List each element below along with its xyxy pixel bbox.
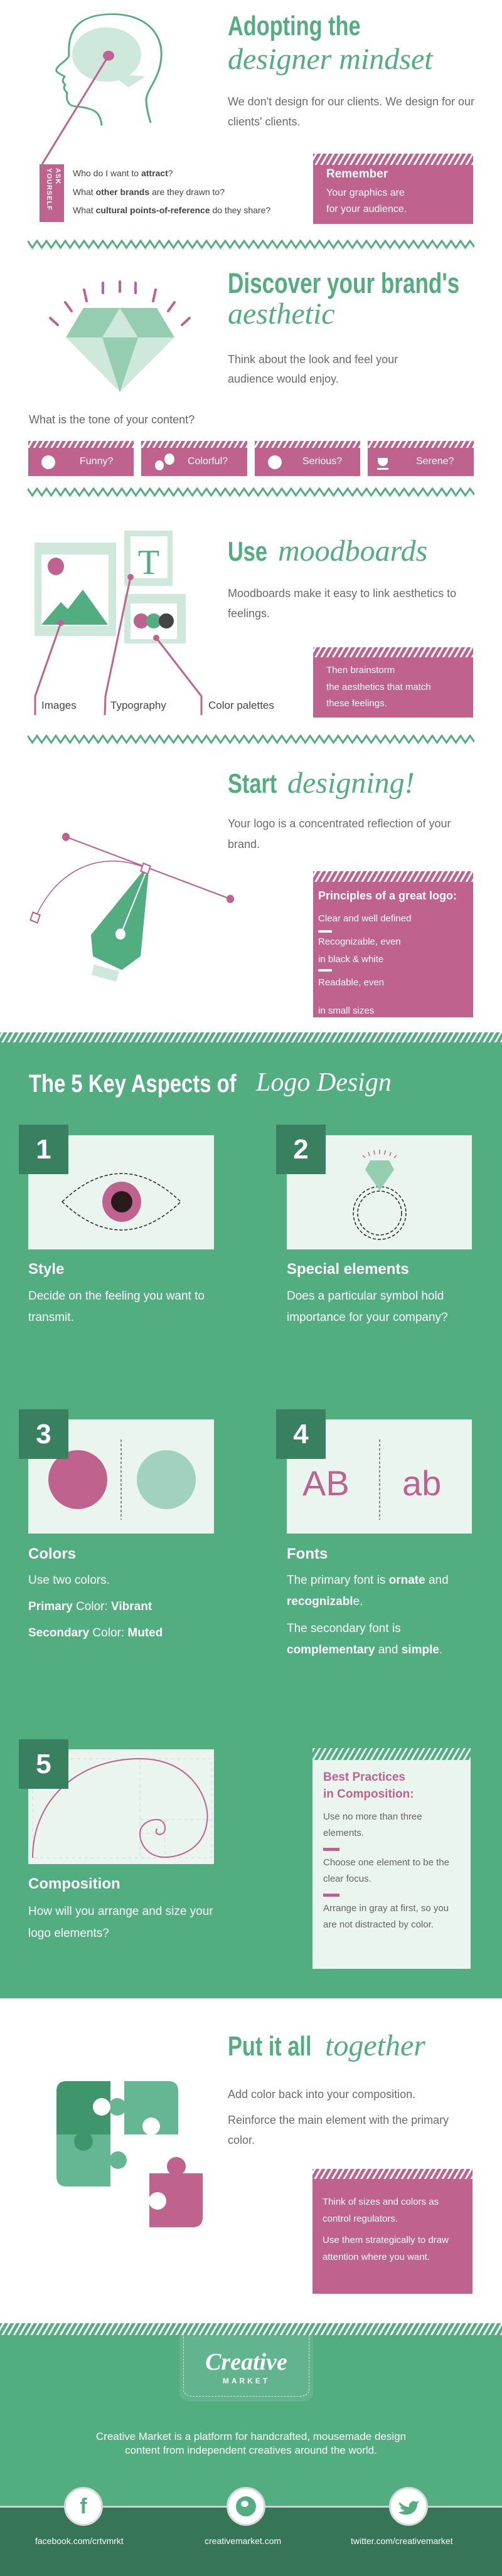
callout: principles of a great logo: Principles of a great logo: [318,889,457,902]
title: adopting the designer mindset [228,11,433,76]
callout: sizes and colors: Use them strategically to draw attention where you want. [323,2235,449,2262]
title: adopting the designer mindset: Adopting the [228,11,361,41]
text: about: Creative Market is a platform for handcrafted, mousemade design [96,2430,406,2442]
button: funny: Funny? [80,456,113,467]
card 3: colors: 3 [36,1419,51,1450]
text: intro 2: Think about the look and feel your audience would enjoy. [228,353,398,385]
callout: principles of a great logo: Recognizable, even [318,936,401,947]
callout: sizes and colors: Think of sizes and colors as control regulators. [323,2197,439,2224]
button: serene [368,441,474,476]
callout: principles of a great logo: Clear and well defined [318,913,411,924]
labels: moodboard [41,699,274,711]
card 1: style: Decide on the feeling you want to transmit. [28,1290,205,1324]
icon: eye [61,1173,181,1231]
title: adopting the designer mindset: designer mindset [228,43,433,76]
callout: principles of a great logo: in small sizes [318,1005,374,1016]
card 3: colors: Use two colors. [28,1574,110,1587]
text: questions: What other brands are they drawn to? [73,187,225,197]
logo: creative market: Creative [205,2349,287,2375]
card 2: special elements: Special elements [287,1261,409,1278]
title: start designing: Start [228,768,277,799]
label: ask yourself [40,164,64,222]
tone buttons [28,441,474,476]
title: discover your brand's aesthetic [228,267,459,331]
logo: creative market: MARKET [223,2377,270,2385]
callout: remember: Your graphics are [326,188,405,198]
callout: brainstorm: Then brainstorm [326,665,395,676]
icon: color circles [48,1439,196,1520]
callout: principles of a great logo [313,871,473,1017]
card 1: style: 1 [36,1134,51,1165]
icon: diamond [49,280,191,392]
links: twitter.com/creativemarket [351,2536,453,2546]
callout: remember: Remember [326,167,388,181]
logo: creative market [179,2335,313,2402]
card 3: colors: Colors [28,1545,76,1562]
title: use moodboards: Use [228,536,267,567]
heading: 5 key aspects [29,1068,392,1098]
button: serious [255,441,360,476]
card 4: fonts: The secondary font is complementary and simple. [287,1622,442,1656]
links: facebook.com/crtvmrkt [35,2536,124,2546]
card 2: special elements: 2 [293,1134,309,1165]
text: put it together [228,2088,449,2146]
zigzag [28,734,474,744]
labels: moodboard: Typography [110,699,166,711]
card 1: style [19,1125,214,1324]
callout: principles of a great logo: in black & white [318,954,383,965]
illustration: moodboard: T [138,543,159,582]
card 1: style: Style [28,1261,64,1278]
label: ask yourself: YOURSELF [45,168,53,211]
button: colorful [141,441,247,476]
callout: best practices in composition: in Composition: [323,1788,414,1801]
callout: best practices in composition: Use no more than three elements. Choose one element to be the clear focus. Arrange in gray at first, so you are not distracted by color. [323,1811,449,1930]
panel: 5 key aspects [0,1032,502,1998]
text: put it together: Add color back into your composition. [228,2088,415,2101]
title: start designing [228,766,415,800]
icon: head with brain [41,13,163,164]
title: put it all together [228,2029,425,2062]
label: ask yourself: ASK [54,168,61,184]
text: questions: Who do I want to attract? [73,168,173,178]
callout: brainstorm [313,647,473,718]
text: intro 1: We don't design for our clients. We design for our clients' clients. [228,95,474,128]
icon: golden spiral [32,1758,212,1858]
text: about: content from independent creatives around the world. [125,2444,377,2456]
card 5: composition: Composition [28,1875,120,1892]
callout: sizes and colors [312,2169,473,2294]
card 4: fonts: 4 [293,1419,309,1450]
text: questions [73,168,270,215]
callout: brainstorm: the aesthetics that match [326,682,431,692]
callout: best practices in composition: Best Practices [323,1771,405,1784]
icon: facebook [64,2487,103,2526]
callout: remember [313,154,473,224]
title: discover your brand's aesthetic: Discover your brand's [228,267,459,299]
icon: globe [227,2487,265,2526]
callout: remember: for your audience. [326,204,407,215]
text: about [96,2430,406,2456]
icon: twitter [389,2487,428,2526]
card 5: composition [19,1739,214,1940]
card 4: fonts [276,1409,472,1656]
icon: AB ab: AB [302,1463,350,1503]
card 5: composition: 5 [36,1749,51,1779]
text: tone question: What is the tone of your content? [29,413,195,426]
zigzag [28,487,474,497]
title: put it all together: together [325,2029,425,2062]
card 2: special elements [276,1125,472,1324]
button: serious: Serious? [302,456,342,467]
heading: 5 key aspects: Logo Design [256,1068,392,1097]
zigzag [28,240,474,250]
icon: pen tool [29,833,234,982]
title: discover your brand's aesthetic: aesthetic [228,297,335,331]
icon: puzzle [56,2081,203,2227]
footer [0,2323,502,2576]
button: funny [28,441,134,476]
callout: best practices in composition [312,1748,471,1969]
card 3: colors: Secondary Color: Muted [28,1626,163,1640]
card 5: composition: How will you arrange and size your logo elements? [28,1905,213,1940]
card 2: special elements: Does a particular symbol hold importance for your company? [287,1290,448,1324]
links [35,2536,453,2546]
title: put it all together: Put it all [228,2031,311,2062]
button: serene: Serene? [416,456,454,467]
button: colorful: Colorful? [188,456,228,467]
callout: brainstorm: these feelings. [326,698,387,709]
labels: moodboard: Images [41,699,77,711]
card 4: fonts: Fonts [287,1545,328,1562]
text: put it together: Reinforce the main element with the primary color. [228,2114,449,2146]
card 4: fonts: The primary font is ornate and recognizable. [287,1574,449,1608]
heading: 5 key aspects: The 5 Key Aspects of [29,1070,237,1098]
title: use moodboards: moodboards [278,534,427,568]
text: moodboards: Moodboards make it easy to link aesthetics to feelings. [228,587,456,620]
labels: moodboard: Color palettes [208,699,274,711]
icon: AB ab [302,1439,441,1520]
links: creativemarket.com [205,2536,281,2546]
card 3: colors: Primary Color: Vibrant [28,1600,152,1613]
icon: ring [353,1150,407,1240]
text: start designing: Your logo is a concentrated reflection of your brand. [228,817,451,851]
card 3: colors [19,1409,214,1640]
title: start designing: designing! [287,766,415,800]
illustration: moodboard [34,531,202,715]
text: questions: What cultural points-of-reference do they share? [73,205,270,215]
icon: facebook: f [80,2494,87,2518]
callout: principles of a great logo: Readable, even [318,977,384,988]
icon: AB ab: ab [402,1463,441,1503]
